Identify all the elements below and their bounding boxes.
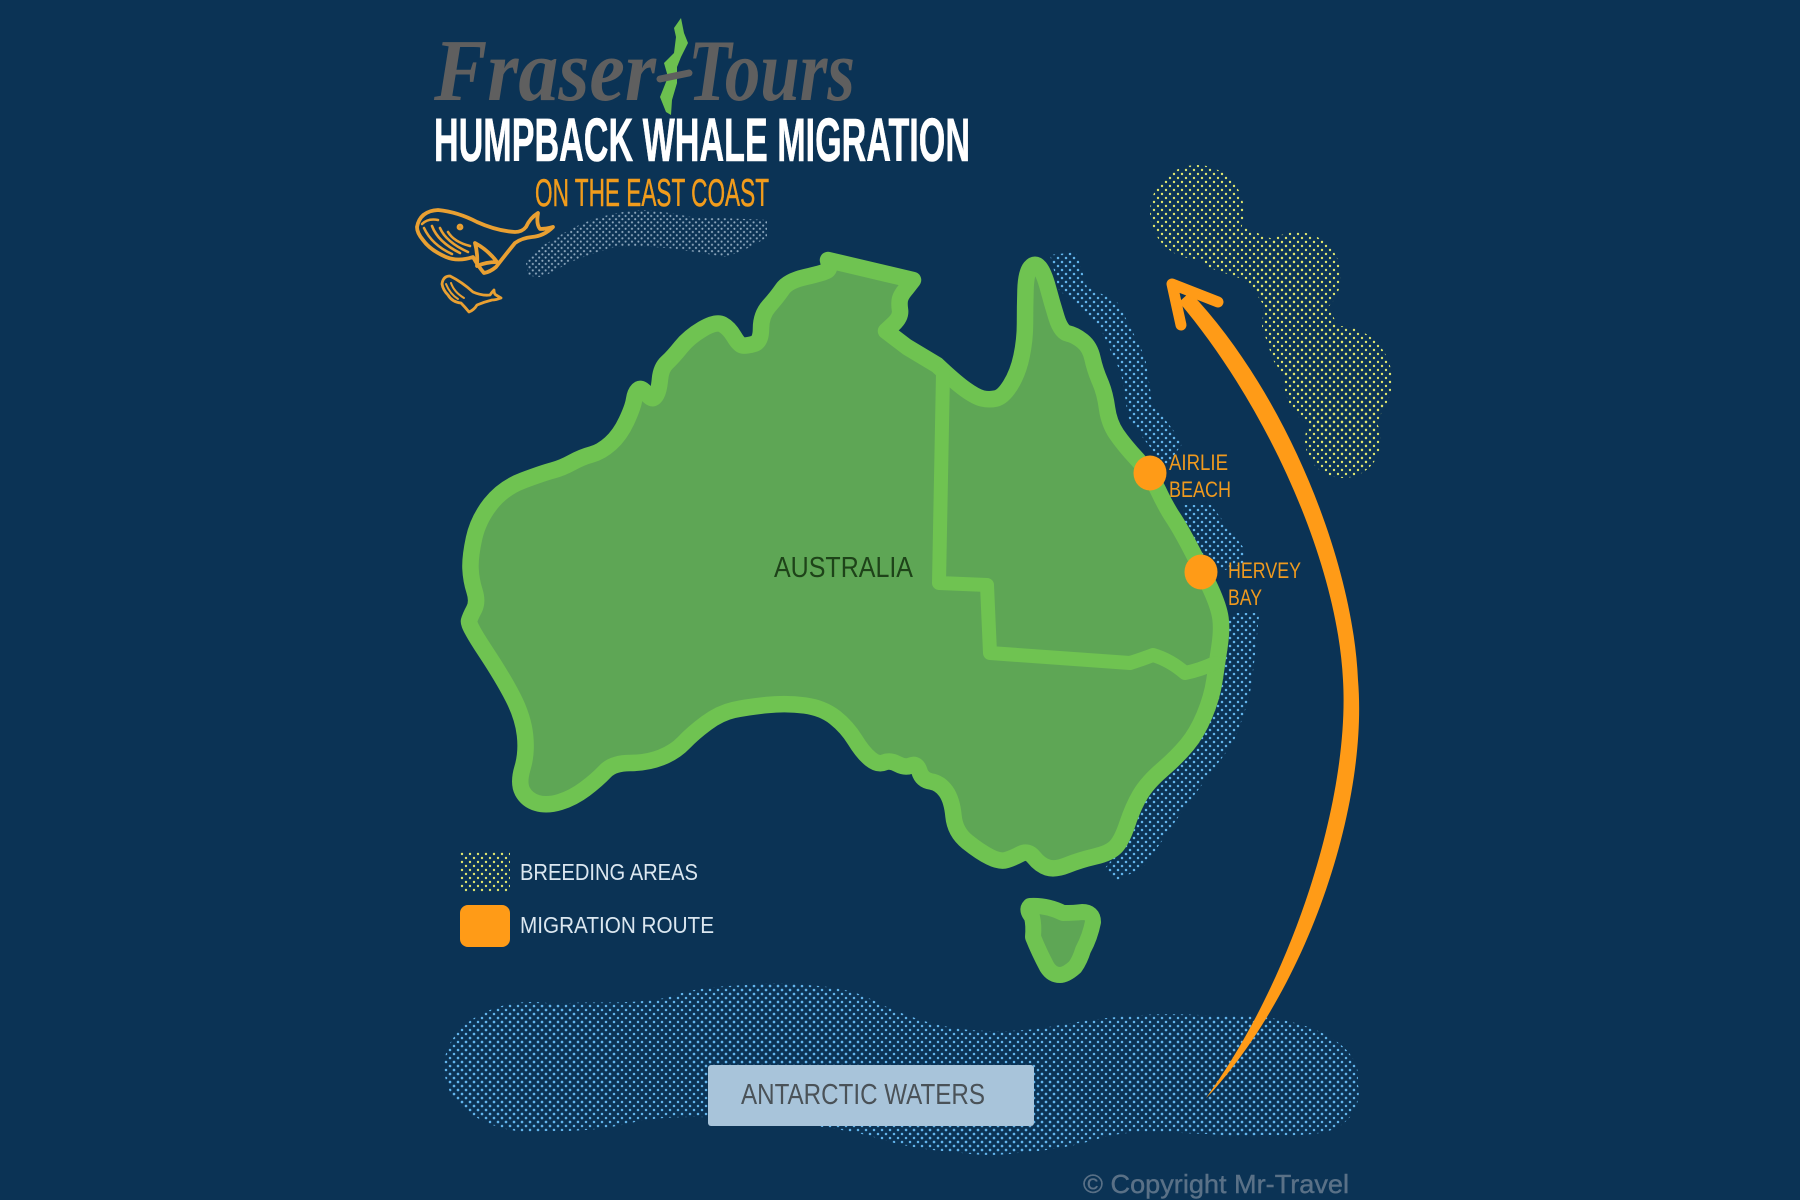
- dotted patch: north-west waters: [526, 210, 767, 277]
- label: Australia: AUSTRALIA: [774, 552, 914, 584]
- location dot: [1134, 456, 1166, 490]
- dotted area: south-east coast: [1105, 613, 1259, 880]
- marker: Airlie Beach: [1134, 450, 1231, 502]
- title: HUMPBACK WHALE MIGRATION: [434, 106, 970, 174]
- icon: whale calf: [442, 276, 501, 312]
- label box: Antarctic waters: [708, 1065, 1034, 1126]
- location label: HERVEY: [1228, 558, 1301, 583]
- location label: BEACH: [1169, 477, 1231, 502]
- legend swatch: breeding areas: [460, 852, 510, 892]
- state borders: [939, 373, 1215, 673]
- legend swatch: migration route: [460, 905, 510, 947]
- legend label: migration route: MIGRATION ROUTE: [520, 912, 714, 938]
- location label: BAY: [1228, 585, 1262, 610]
- mainland: [469, 260, 1221, 868]
- icon: adult humpback whale: [417, 210, 553, 273]
- map: Australia: [469, 260, 1221, 975]
- location label: AIRLIE: [1169, 450, 1228, 475]
- dotted area: coast near Hervey Bay: [1183, 505, 1245, 570]
- location dot: [1184, 554, 1218, 590]
- box: [708, 1065, 1034, 1126]
- copyright: © Copyright Mr-Travel: [1083, 1169, 1349, 1199]
- logo icon: Fraser Island: [660, 18, 688, 115]
- logo: Fraser Tours: [433, 18, 855, 120]
- legend: [460, 852, 714, 947]
- arrow: migration route: [1172, 284, 1359, 1098]
- box label: ANTARCTIC WATERS: [741, 1079, 985, 1111]
- arrow head: [1172, 284, 1218, 325]
- dotted area: Great Barrier Reef north: [1050, 252, 1183, 466]
- logo word: Tours: Tours: [688, 23, 855, 120]
- marker: Hervey Bay: [1184, 554, 1301, 610]
- logo word: Fraser: Fraser: [433, 23, 657, 120]
- arrow shaft: [1179, 292, 1359, 1098]
- legend label: breeding areas: BREEDING AREAS: [520, 859, 698, 885]
- dotted area: Antarctic waters: [444, 983, 1359, 1155]
- Tasmania: [1028, 906, 1093, 975]
- dotted area: breeding grounds offshore: [1150, 165, 1392, 478]
- subtitle: ON THE EAST COAST: [535, 172, 769, 215]
